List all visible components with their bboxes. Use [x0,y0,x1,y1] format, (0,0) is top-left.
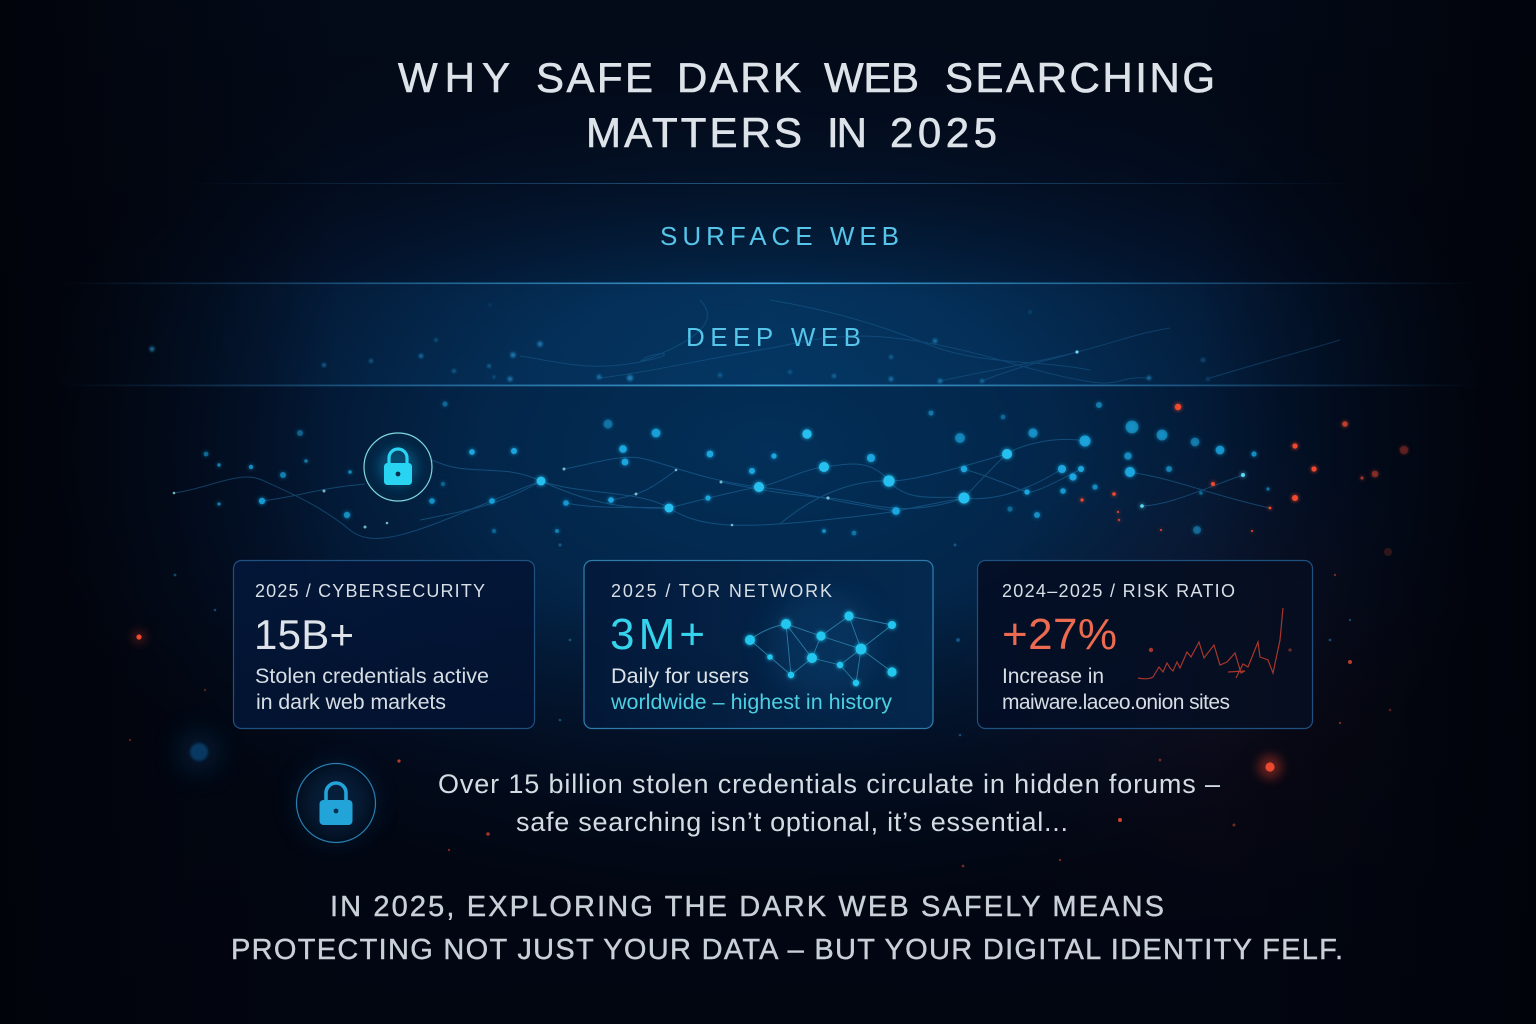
closing statement: IN 2025, EXPLORING THE DARK WEB SAFELY MEANS [330,891,1164,923]
card description [1002,665,1230,714]
callout text: Over 15 billion stolen credentials circulate in hidden forums – [438,769,1220,799]
stat value: 3M+ [610,610,705,659]
callout text [438,769,1220,837]
sparkline [1138,608,1292,679]
network nodes: blue [204,401,1270,535]
title: WHY [398,54,510,101]
network threads [174,439,1270,538]
layer dividers [60,183,1480,386]
closing statement: PROTECTING NOT JUST YOUR DATA – BUT YOUR DIGITAL IDENTITY FELF. [231,934,1343,966]
closing statement [231,891,1343,966]
icon: padlock in ring [364,433,432,501]
title: SEARCHING [945,54,1215,101]
title: IN [827,109,867,156]
card label: 2025 / CYBERSECURITY [255,581,485,601]
title: 2025 [890,109,997,156]
panel: risk ratio stat [978,560,1312,728]
card description [610,664,892,714]
label: deep web: DEEP WEB [686,322,861,352]
lower red and blue particles [129,543,1392,867]
title: WEB [824,54,919,101]
network nodes: red particles [1080,404,1408,532]
title: DARK [677,54,801,101]
card description: Daily for users [611,664,749,688]
card description: Increase in [1002,665,1104,688]
title [398,54,1215,156]
stat value: +27% [1002,610,1117,659]
card description: in dark web markets [256,690,446,714]
card label: 2025 / TOR NETWORK [611,581,832,601]
title: SAFE [536,54,653,101]
deep web faint threads [520,300,1340,383]
deep web faint particles [150,304,1210,383]
stat value: 15B+ [254,611,354,658]
card description: Stolen credentials active [255,664,489,688]
network diagram [745,590,897,700]
label: surface web: SURFACE WEB [660,221,899,251]
panel: tor network stat [584,560,933,728]
card description [255,664,489,714]
panel: cybersecurity stat [234,560,534,728]
card description: worldwide – highest in history [610,690,892,714]
card label: 2024–2025 / RISK RATIO [1002,581,1235,601]
callout text: safe searching isn’t optional, it’s essential... [516,807,1068,837]
network nodes: small bright [173,468,830,528]
title: MATTERS [586,109,802,156]
deep web bright particle [1075,350,1079,354]
icon: padlock callout [296,764,376,842]
card description: maiware.laceo.onion sites [1002,691,1230,714]
